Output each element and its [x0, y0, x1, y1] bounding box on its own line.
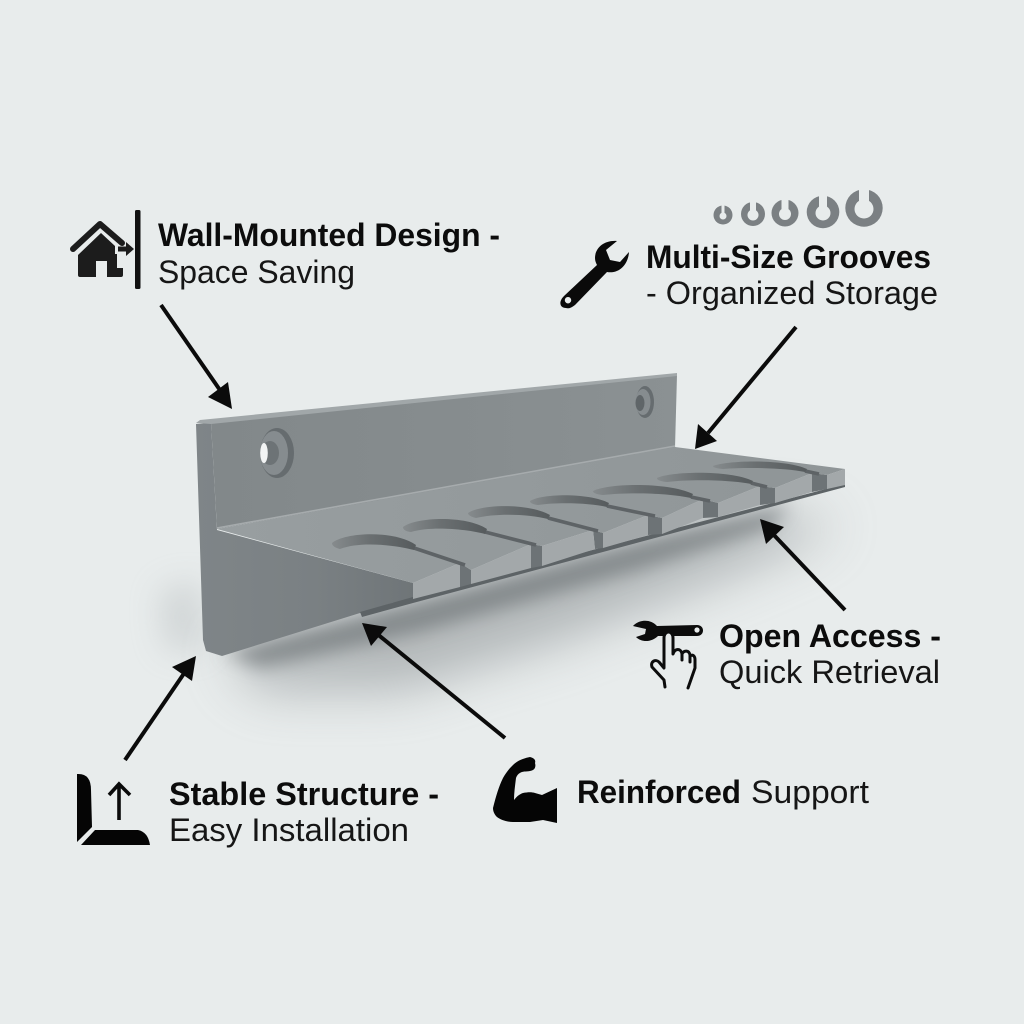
junction highlight	[217, 446, 675, 528]
arrow: reinforced support	[362, 623, 505, 738]
groove slots	[414, 471, 819, 565]
heading: wall-mounted design: Wall-Mounted Design -	[158, 217, 500, 253]
icon: groove sizes	[714, 188, 883, 228]
text: space saving: Space Saving	[158, 254, 355, 290]
shelf top surface	[217, 447, 845, 583]
screw hole right	[636, 386, 654, 418]
shelf shadow	[160, 505, 840, 690]
text: reinforced support: Reinforced	[577, 774, 741, 810]
text: organized storage: - Organized Storage	[646, 275, 938, 311]
callout: stable structure	[77, 774, 439, 848]
icon: wrench and hand	[633, 621, 703, 688]
text: reinforced support: Support	[751, 774, 869, 810]
icon: flexed bicep	[493, 757, 557, 823]
groove 1	[332, 534, 416, 550]
text: easy installation: Easy Installation	[169, 812, 409, 848]
bracket side face	[196, 423, 413, 656]
groove 4	[530, 495, 609, 507]
shelf underside strip	[360, 484, 845, 617]
heading: stable structure: Stable Structure -	[169, 776, 439, 812]
arrow: grooves	[695, 327, 796, 449]
arrow: open access	[760, 519, 845, 610]
callout: multi-size grooves	[560, 188, 938, 311]
icon: L bracket with arrow	[77, 774, 150, 845]
notch floors	[460, 473, 827, 587]
groove 3	[468, 506, 550, 519]
heading: multi-size grooves: Multi-Size Grooves	[646, 239, 931, 275]
groove 6	[657, 473, 753, 484]
text: quick retrieval: Quick Retrieval	[719, 654, 940, 690]
groove 2	[403, 519, 487, 534]
groove 5	[593, 485, 693, 498]
callout: reinforced support	[493, 757, 869, 823]
icon: house against wall	[73, 210, 140, 289]
bracket: wall-mounted tool rack	[196, 373, 845, 656]
icon: wrench	[560, 241, 629, 308]
back plate top edge	[196, 373, 677, 424]
screw hole left	[260, 428, 294, 478]
callout: open access	[633, 618, 941, 690]
arrow: stable structure	[125, 656, 196, 760]
callout: wall-mounted design	[73, 210, 500, 290]
heading: open access: Open Access -	[719, 618, 941, 654]
back plate front face	[211, 375, 677, 529]
shelf tab front faces	[413, 469, 845, 599]
arrow: wall plate	[161, 305, 232, 409]
groove 7	[713, 461, 807, 472]
